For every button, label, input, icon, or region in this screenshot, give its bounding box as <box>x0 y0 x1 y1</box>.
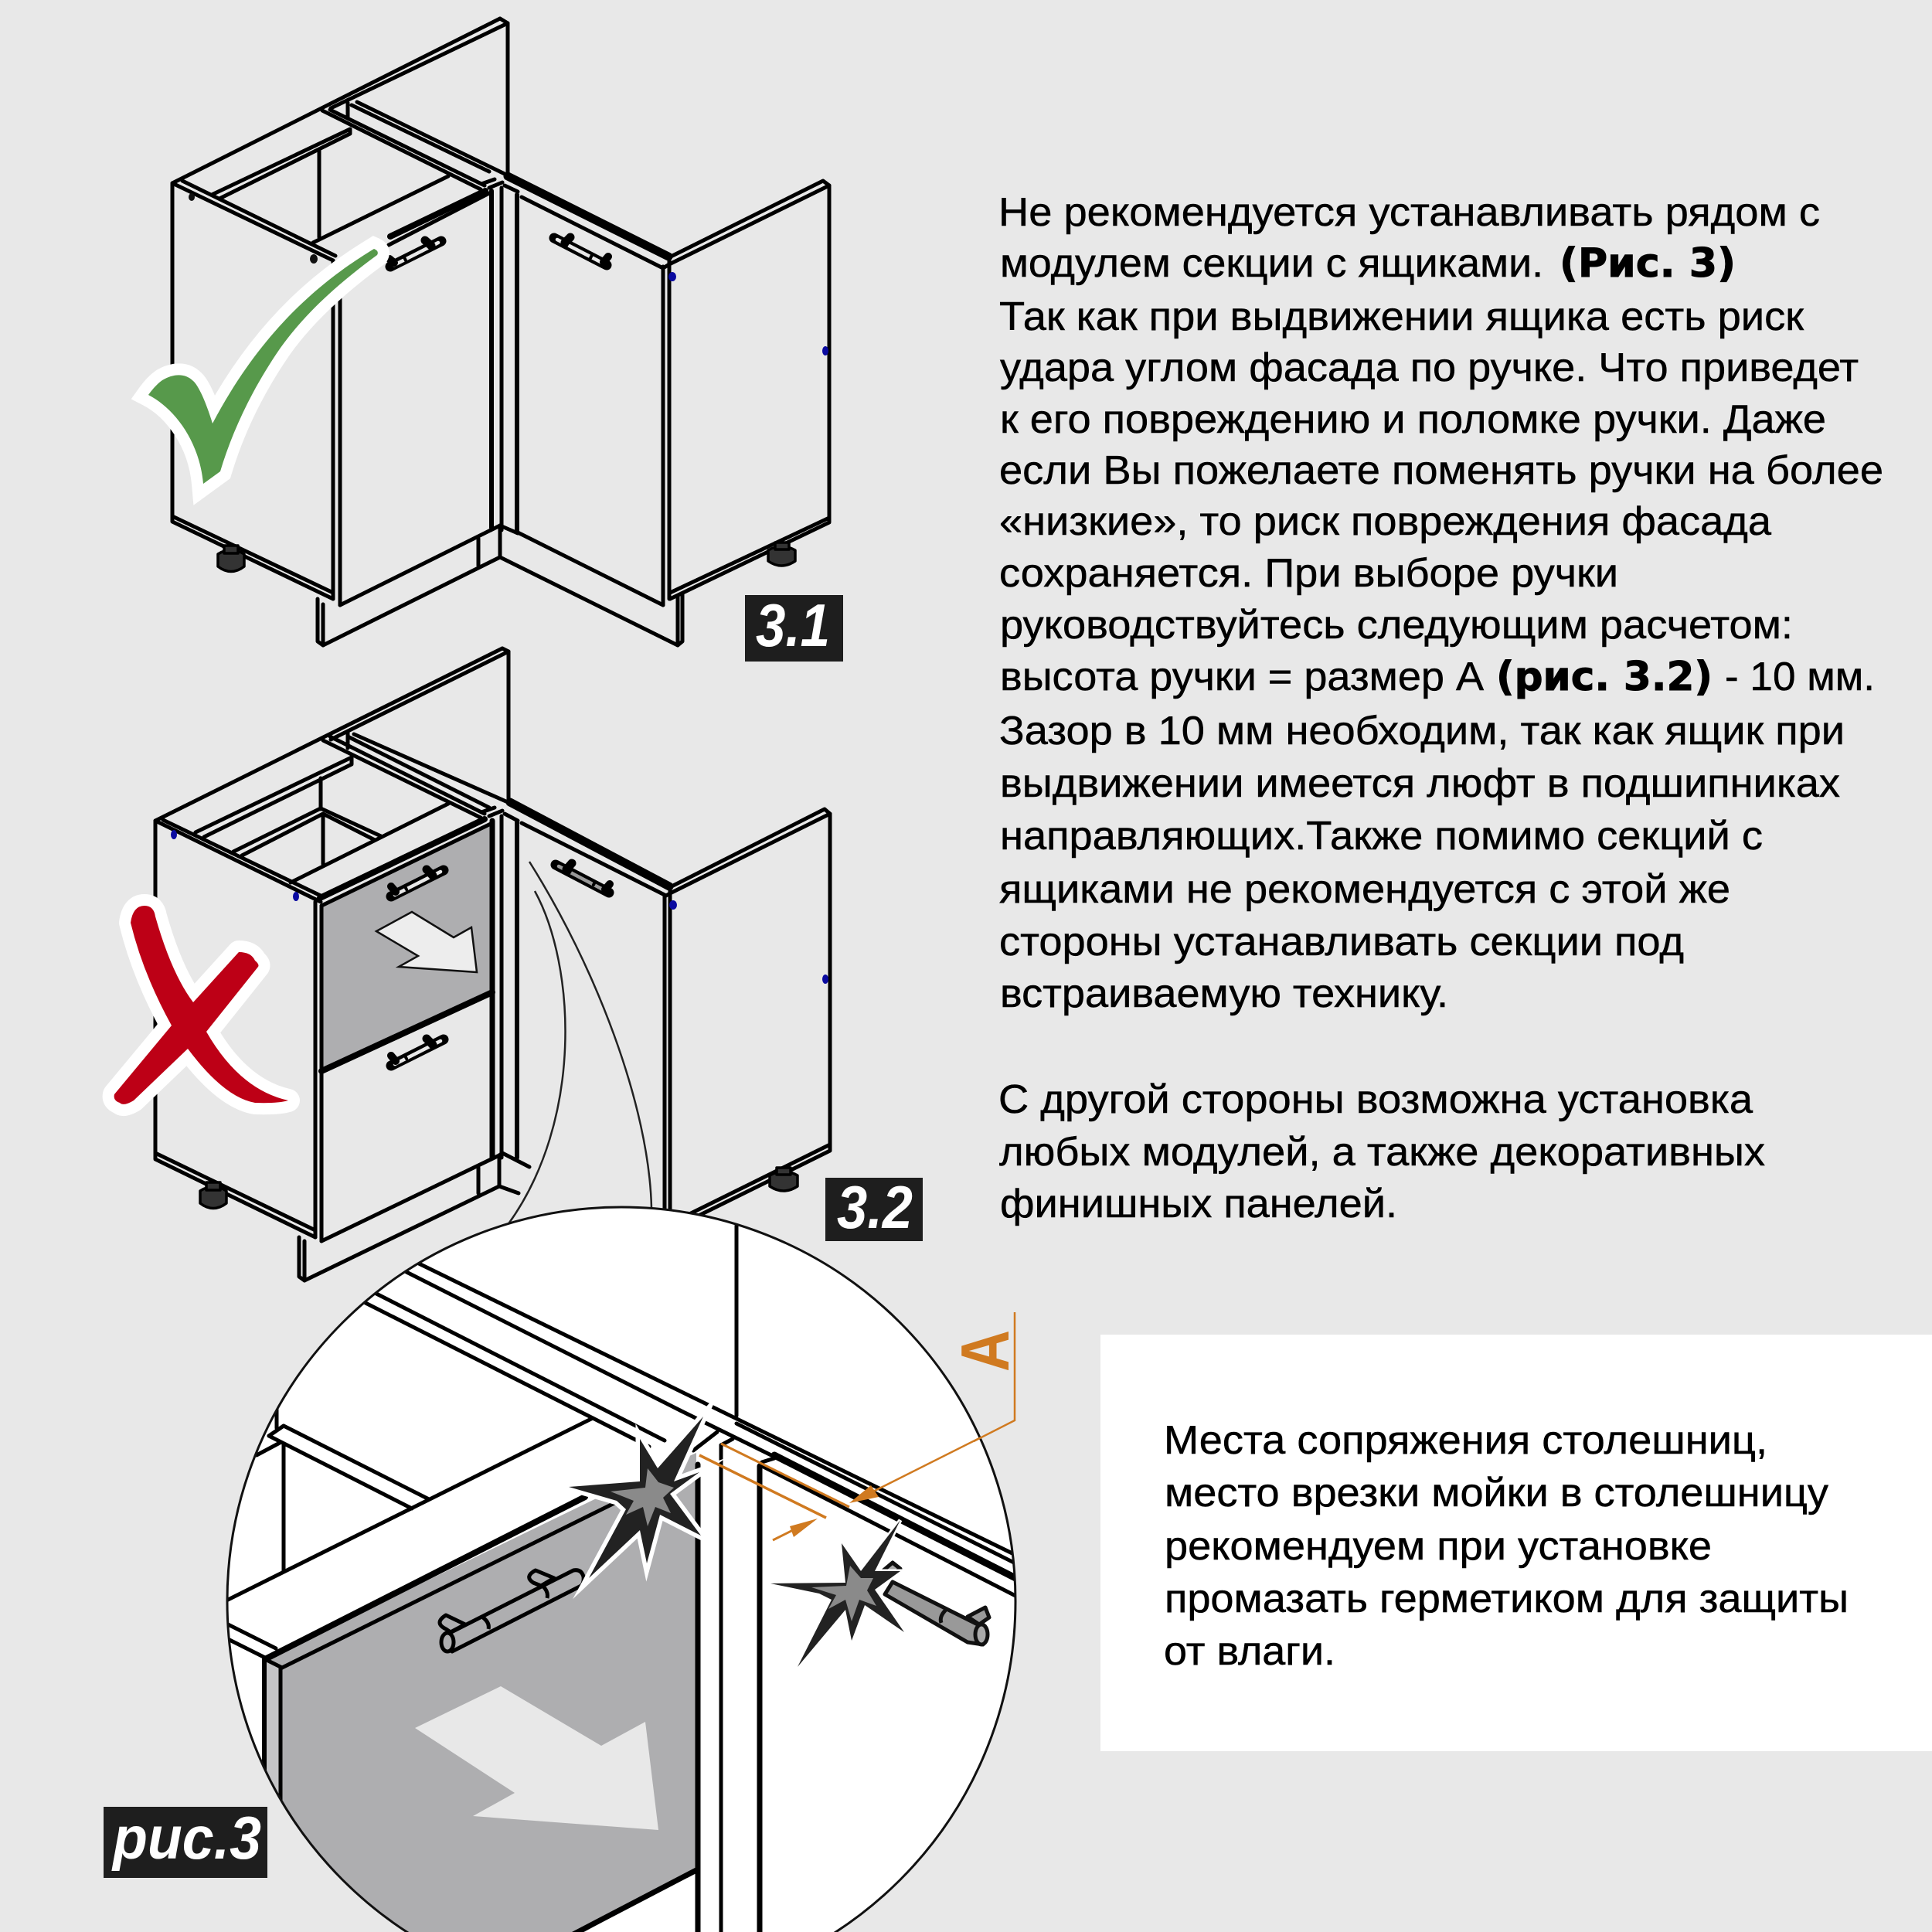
text block: main paragraph: если Вы пожелаете поменять ручки на более <box>999 448 1883 493</box>
dimension label A: A <box>947 1330 1023 1372</box>
icon: red cross <box>114 906 288 1104</box>
text block: main paragraph: Зазор в 10 мм необходим, так как ящик при <box>999 709 1845 753</box>
icon: impact star left <box>569 1417 703 1578</box>
grey upper drawer front <box>321 822 492 1071</box>
back rails <box>419 1264 1020 1557</box>
fastening dots 3.2 <box>171 830 828 984</box>
text block: main paragraph: «низкие», то риск повреждения фасада <box>999 499 1771 544</box>
panel: zoomed detail circle <box>227 1207 1023 1932</box>
text block: main paragraph: удара углом фасада по ручке. Что приведет <box>1000 345 1859 390</box>
adjustable foot right <box>770 1168 798 1191</box>
adjustable foot right <box>768 543 795 566</box>
panel: sealant note: рекомендуем при установке <box>1165 1524 1712 1569</box>
text block: second paragraph <box>998 1077 1765 1226</box>
text block: main paragraph: Не рекомендуется устанавливать рядом с <box>998 190 1820 235</box>
label 3.2: 3.2 <box>837 1173 913 1241</box>
text block: main paragraph: - 10 мм. <box>1725 655 1875 699</box>
text block: main paragraph: высота ручки = размер А <box>1000 655 1484 699</box>
text block: second paragraph: С другой стороны возможна установка <box>998 1077 1753 1122</box>
text block: main paragraph: направляющих.Также помимо секций с <box>1000 814 1763 859</box>
dimension A lines <box>699 1437 978 1541</box>
text block: main paragraph: модулем секции с ящиками. <box>1000 241 1543 286</box>
handle right door grey <box>556 863 610 893</box>
panel: sealant note: от влаги. <box>1164 1629 1335 1674</box>
grey drawer front detail <box>232 1453 696 1932</box>
handle upper drawer <box>391 869 444 896</box>
handle lower drawer <box>391 1039 444 1066</box>
handle left door <box>389 240 441 267</box>
text block: main paragraph: встраиваемую технику. <box>1000 971 1448 1016</box>
text block: main paragraph: Так как при выдвижении ящика есть риск <box>999 294 1804 339</box>
text block: main paragraph: (рис. 3.2) <box>1496 654 1713 700</box>
handle detail: grey drawer <box>440 1570 583 1651</box>
handle right door <box>554 237 608 265</box>
panel: sealant note: место врезки мойки в столешницу <box>1165 1471 1828 1515</box>
arrow: drawer pull direction large <box>415 1686 658 1830</box>
text block: main paragraph: к его повреждению и поломке ручки. Даже <box>1000 397 1826 442</box>
label 3.1: 3.1 <box>756 591 830 659</box>
cabinet illustration 3.1 <box>172 19 829 645</box>
fastening dots 3.1 <box>189 193 828 355</box>
text block: main paragraph: (Рис. 3) <box>1560 240 1736 287</box>
text block: main paragraph: стороны устанавливать секции под <box>999 920 1684 964</box>
adjustable foot left <box>200 1182 226 1209</box>
text block: second paragraph: финишных панелей. <box>1000 1182 1397 1226</box>
text block: main paragraph <box>998 190 1883 1016</box>
handle detail: right door <box>883 1563 989 1645</box>
text block: second paragraph: любых модулей, а также декоративных <box>999 1130 1765 1175</box>
adjustable foot left <box>218 546 244 572</box>
thin swing curves <box>508 862 651 1225</box>
arrow: drawer pull direction small <box>376 912 477 972</box>
text block: main paragraph: ящиками не рекомендуется с этой же <box>999 867 1730 912</box>
panel: sealant note: Места сопряжения столешниц, <box>1164 1418 1767 1463</box>
label рис.3: рис.3 <box>111 1804 261 1872</box>
panel: sealant note <box>1100 1335 1932 1751</box>
text block: main paragraph: руководствуйтесь следующим расчетом: <box>1000 603 1793 648</box>
icon: green check mark <box>148 249 378 484</box>
cabinet illustration 3.2 <box>155 648 830 1281</box>
icon: impact star right <box>770 1520 904 1667</box>
dimension line above circle <box>974 1312 1015 1441</box>
text block: main paragraph: сохраняется. При выборе ручки <box>999 551 1618 596</box>
panel: sealant note: промазать герметиком для защиты <box>1165 1577 1849 1621</box>
text block: main paragraph: выдвижении имеется люфт в подшипниках <box>1000 761 1840 806</box>
